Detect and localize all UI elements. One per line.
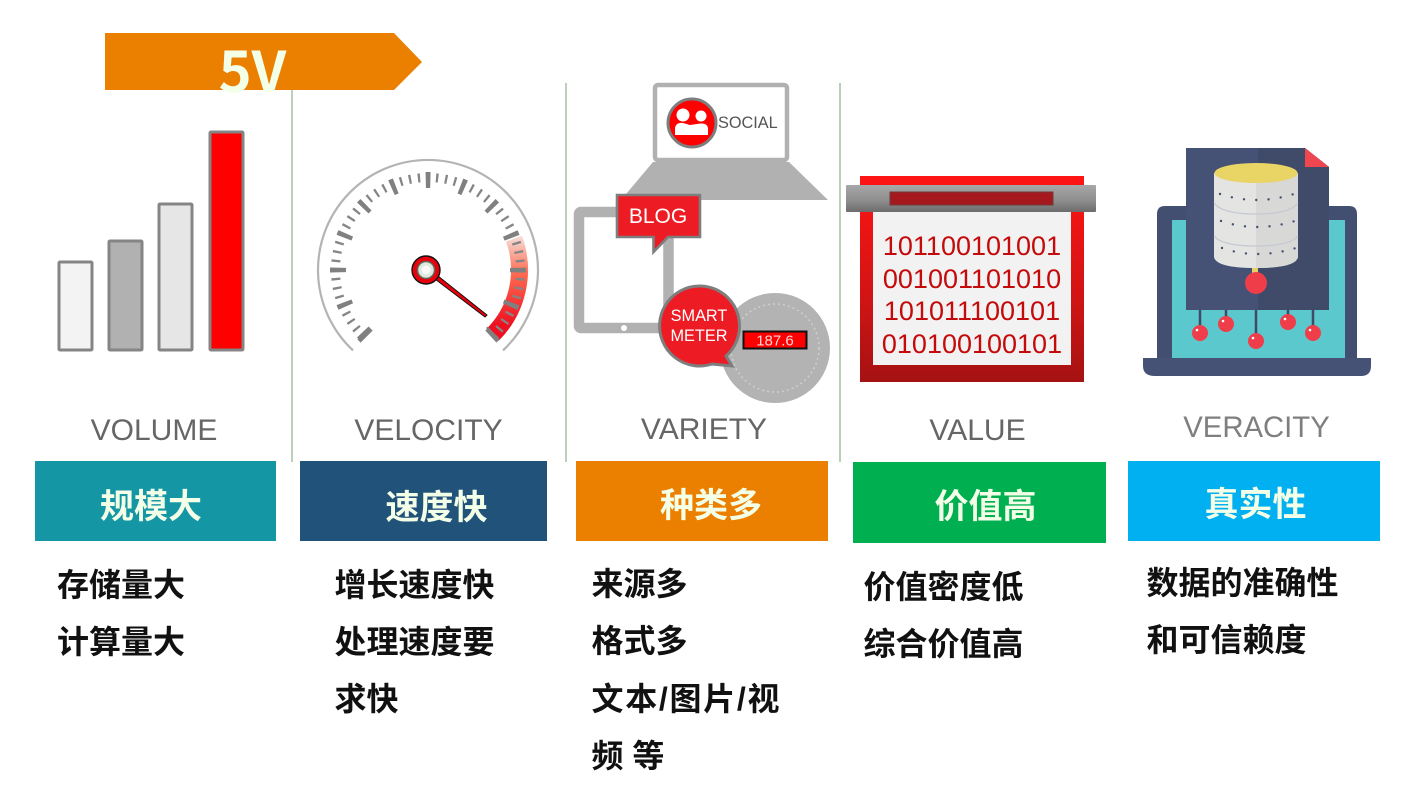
text: velocity description: 求快: [334, 681, 399, 717]
icon: laptop with social badge: [621, 85, 828, 200]
heading: 价值高: 价值高: [934, 488, 1036, 526]
icon: smart meter dial: [720, 293, 830, 403]
icon: laptop with social badge: SOCIAL: [718, 114, 778, 132]
heading: 种类多: 种类多: [660, 487, 762, 525]
heading: 速度快: [300, 461, 547, 541]
text: variety description: 格式多: [592, 623, 688, 659]
heading: 真实性: [1128, 461, 1380, 541]
icon: variety devices: [579, 85, 830, 403]
label: VERACITY: VERACITY: [1183, 411, 1330, 444]
icon: veracity laptop and database: [1143, 148, 1371, 376]
text: velocity description: 处理速度要: [334, 624, 495, 660]
heading: 真实性: 真实性: [1204, 486, 1306, 524]
text: volume description: [57, 567, 185, 660]
icon: velocity gauge: [318, 160, 538, 350]
icon: smart meter bubble: SMART: [671, 307, 727, 325]
text: velocity description: 增长速度快: [334, 567, 495, 603]
text: veracity description: 数据的准确性: [1146, 565, 1339, 601]
icon: value binary sheet: 001001101010: [883, 264, 1061, 294]
icon: smart meter dial: 187.6: [756, 332, 794, 350]
text: variety description: 文本/图片/视: [592, 681, 780, 717]
icon: value binary sheet: 101100101001: [883, 231, 1061, 261]
title banner: 5V: 5V: [219, 28, 287, 109]
label: VALUE: VALUE: [929, 414, 1026, 447]
heading: 速度快: 速度快: [386, 489, 488, 527]
label: VELOCITY: VELOCITY: [354, 414, 503, 447]
heading: 规模大: 规模大: [100, 488, 202, 526]
title banner: 5V: [105, 28, 422, 109]
text: velocity description: [334, 567, 495, 717]
icon: blog speech bubble: BLOG: [629, 205, 687, 228]
icon: smart meter bubble: METER: [671, 327, 727, 345]
icon: smart meter bubble: [660, 286, 740, 366]
heading: 规模大: [35, 461, 276, 541]
heading: 种类多: [576, 461, 828, 541]
icon: tablet: [579, 212, 668, 331]
icon: value binary sheet: 010100100101: [882, 329, 1062, 359]
text: value description: [864, 569, 1024, 662]
icon: volume bar chart: [59, 132, 243, 350]
text: variety description: 频 等: [592, 738, 664, 774]
text: variety description: 来源多: [592, 566, 688, 602]
text: volume description: 计算量大: [57, 624, 185, 660]
text: volume description: 存储量大: [57, 567, 185, 603]
label: VOLUME: VOLUME: [91, 414, 217, 447]
text: value description: 价值密度低: [864, 569, 1024, 605]
text: variety description: [592, 566, 780, 774]
label: VARIETY: VARIETY: [641, 413, 767, 446]
heading: 价值高: [853, 462, 1106, 543]
icon: blog speech bubble: [617, 195, 700, 252]
icon: value binary sheet: 101011100101: [884, 296, 1060, 326]
text: value description: 综合价值高: [864, 626, 1024, 662]
icon: value binary sheet: [846, 176, 1096, 382]
text: veracity description: [1146, 565, 1339, 658]
text: veracity description: 和可信赖度: [1146, 622, 1307, 658]
